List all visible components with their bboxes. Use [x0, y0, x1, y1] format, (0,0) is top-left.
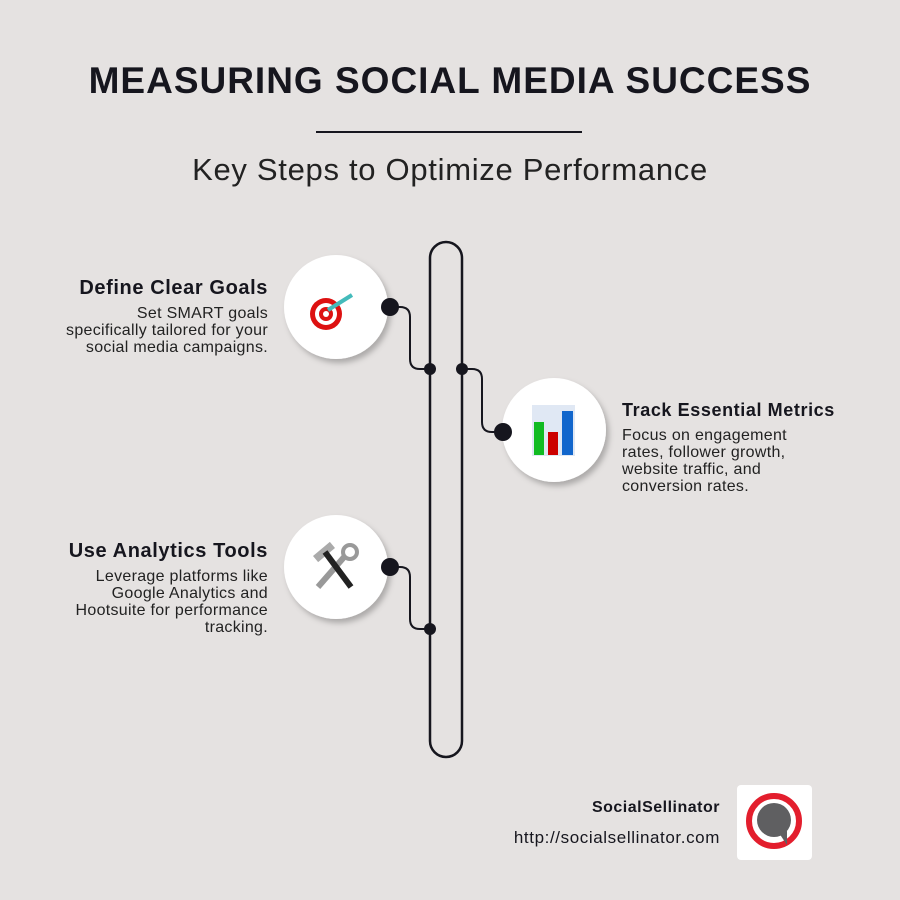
step: Use Analytics Tools: Google Analytics and	[112, 585, 268, 602]
step: Define Clear Goals: Define Clear Goals	[79, 277, 268, 299]
step: Define Clear Goals: social media campaigns.	[86, 339, 268, 356]
step: Define Clear Goals	[66, 277, 268, 356]
icon circle: goals	[284, 255, 388, 359]
footer brand: SocialSellinator	[592, 799, 720, 816]
icon circle: metrics	[502, 378, 606, 482]
step: Define Clear Goals: Set SMART goals	[137, 305, 268, 322]
step: Track Essential Metrics	[622, 400, 835, 495]
step: Track Essential Metrics: conversion rates.	[622, 478, 749, 495]
timeline pill	[430, 242, 462, 757]
footer brand: http://socialsellinator.com	[514, 828, 720, 847]
connectors	[390, 307, 503, 629]
step: Use Analytics Tools: Hootsuite for performance	[76, 602, 268, 619]
step: Use Analytics Tools	[69, 540, 268, 636]
step: Track Essential Metrics: rates, follower growth,	[622, 444, 785, 461]
icon circle: tools	[284, 515, 388, 619]
subtitle: Key Steps to Optimize Performance	[192, 152, 708, 187]
logo	[737, 785, 812, 860]
title: MEASURING SOCIAL MEDIA SUCCESS	[89, 60, 811, 101]
dots	[381, 298, 512, 635]
step: Use Analytics Tools: Leverage platforms like	[96, 568, 268, 585]
step: Define Clear Goals: specifically tailored for your	[66, 322, 268, 339]
step: Track Essential Metrics: Track Essential Metrics	[622, 400, 835, 420]
step: Use Analytics Tools: tracking.	[205, 619, 268, 636]
step: Use Analytics Tools: Use Analytics Tools	[69, 540, 268, 562]
step: Track Essential Metrics: Focus on engagement	[622, 427, 787, 444]
footer brand	[514, 799, 720, 847]
step: Track Essential Metrics: website traffic, and	[622, 461, 761, 478]
